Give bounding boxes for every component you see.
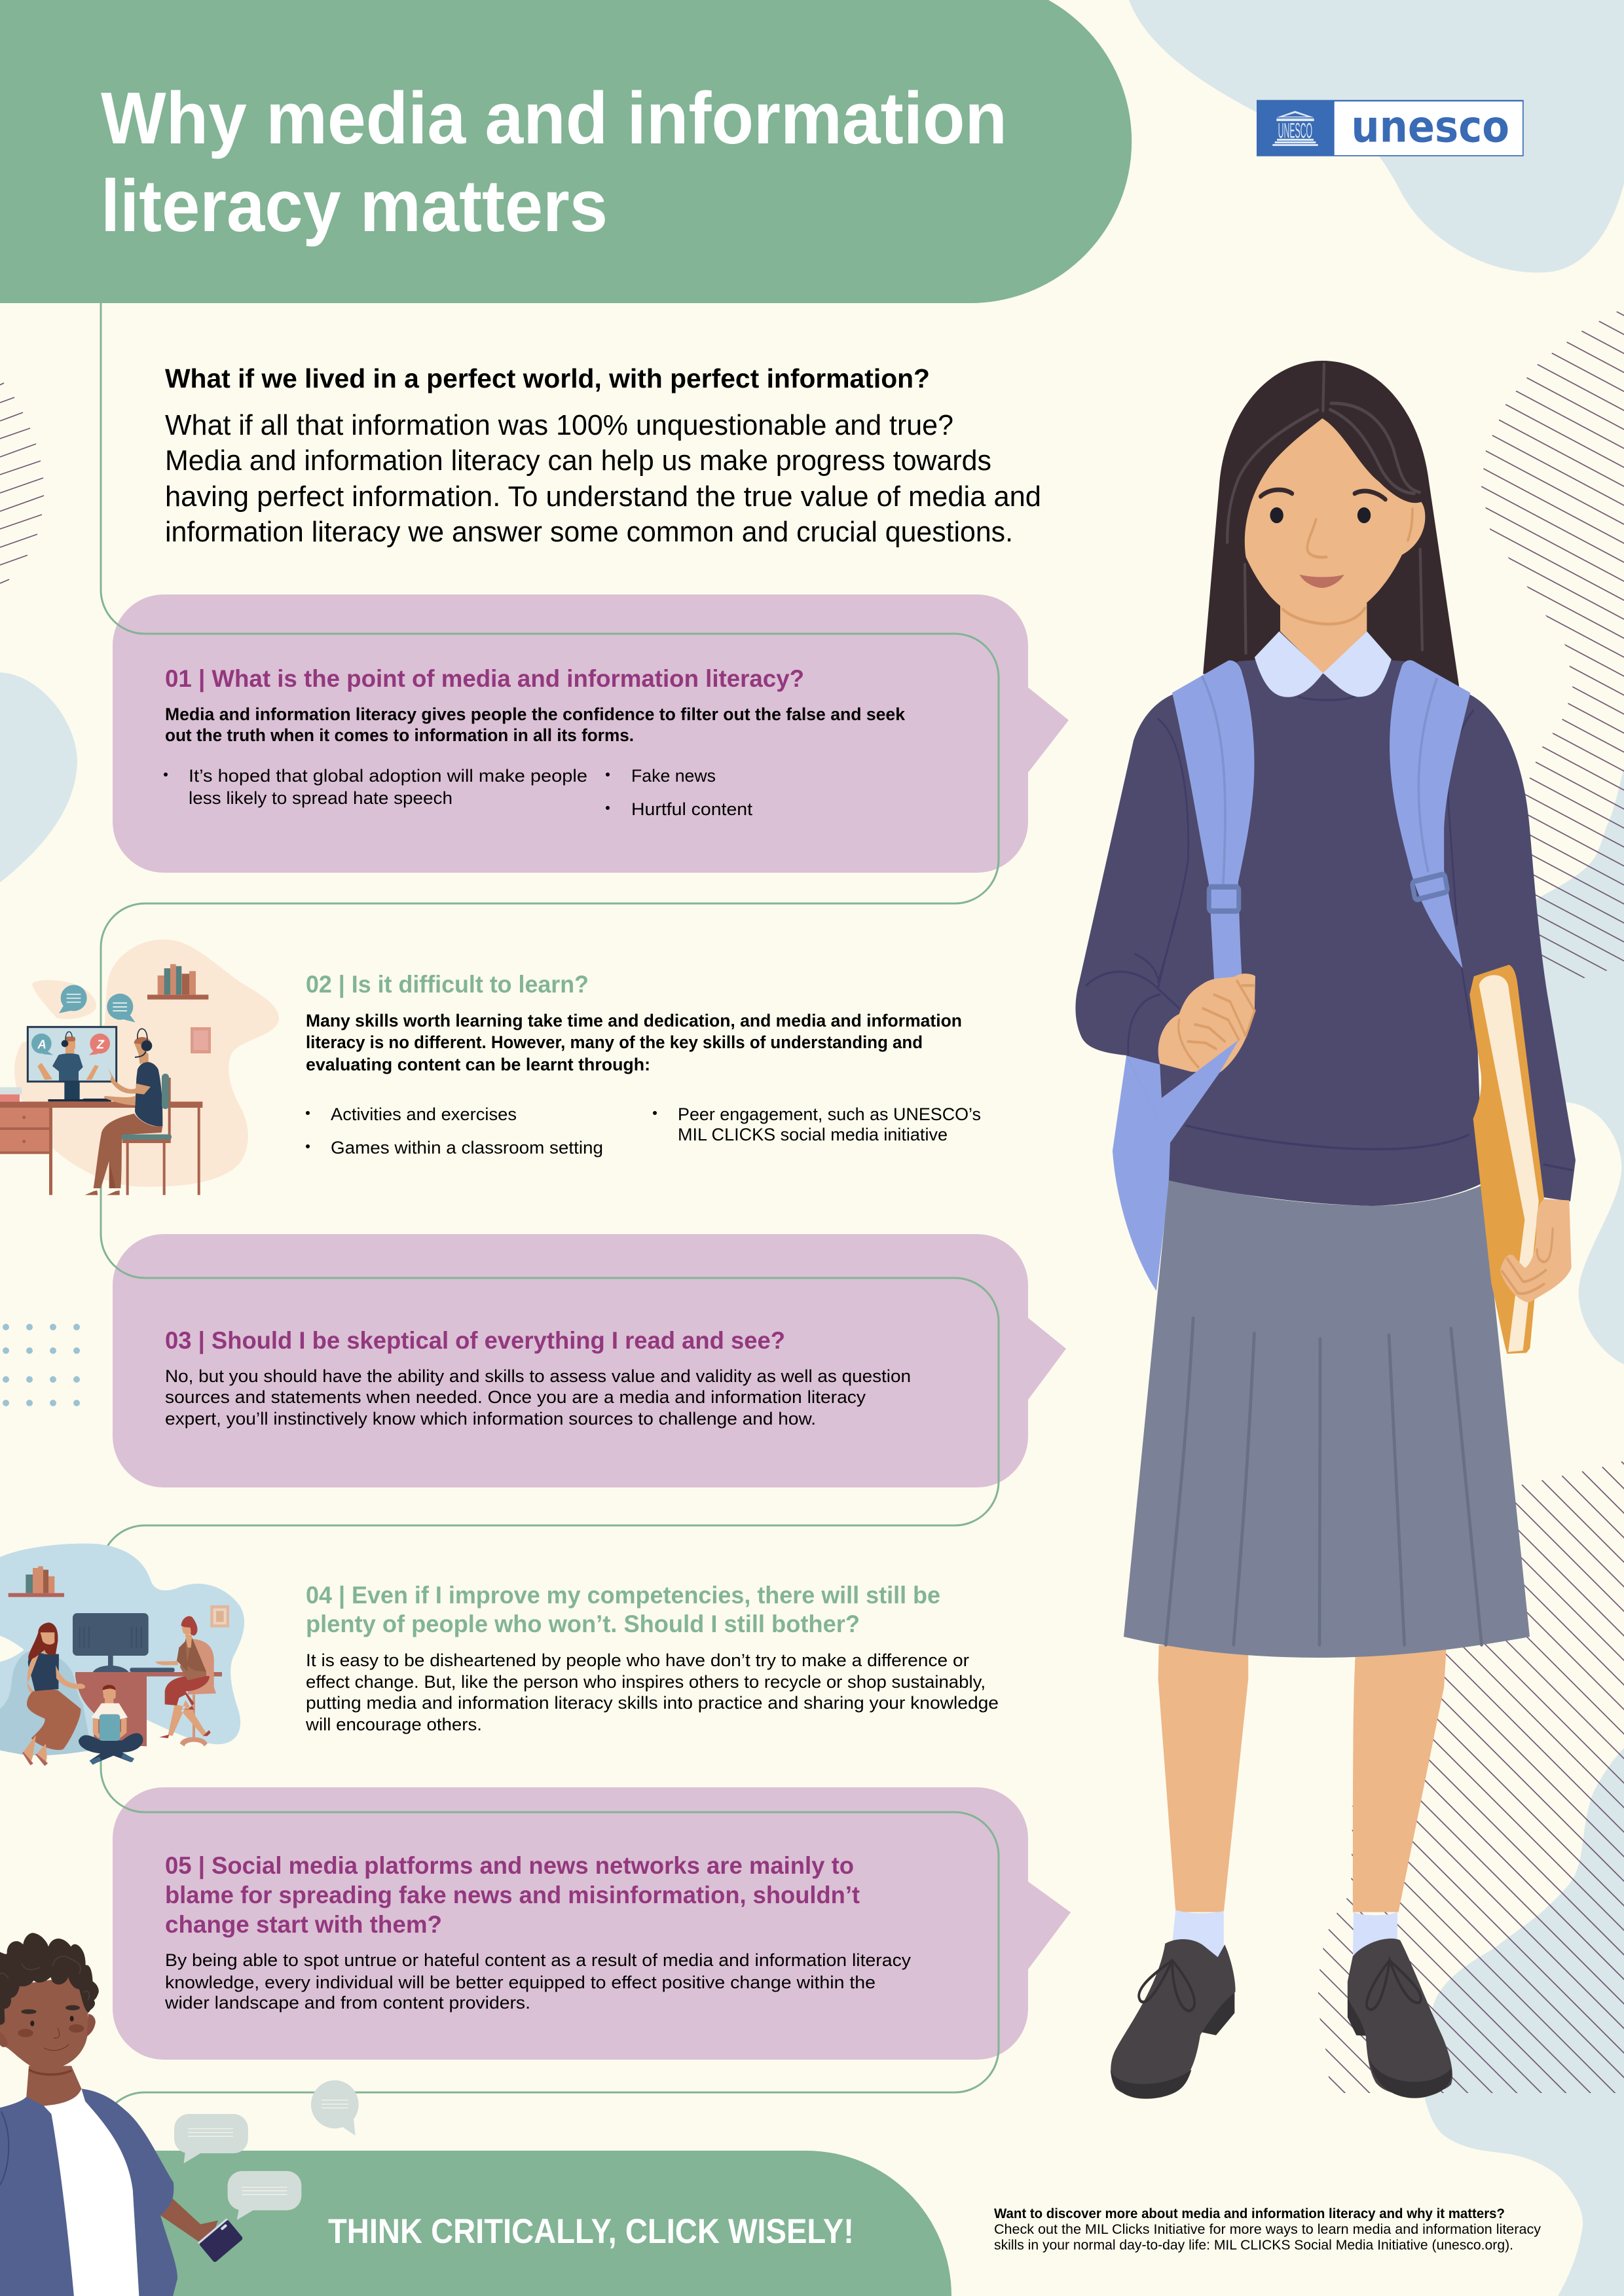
card 01 bullets: Fake news [631,766,716,786]
card 02 bullets: Activities and exercises [331,1104,517,1124]
card 03 body: sources and statements when needed. Once you are a media and information literacy [165,1387,866,1407]
card 05 body: knowledge, every individual will be better equipped to effect positive change within the [165,1973,876,1992]
footer note: Check out the MIL Clicks Initiative for more ways to learn media and information literacy [994,2222,1541,2237]
card 04 body [305,1650,999,1734]
seated boy with tablet [79,1685,143,1765]
monitor with remote person [28,1027,117,1102]
card 04 heading [306,1582,940,1637]
boy ears [0,2014,96,2047]
intro paragraph: Media and information literacy can help us make progress towards [165,445,991,477]
card 03 body: No, but you should have the ability and skills to assess value and validity as well as question [165,1366,911,1386]
card 01 lead: Media and information literacy gives people the confidence to filter out the false and seek [165,704,906,724]
card 02 bullets [306,1104,981,1157]
monitor with remote person: Z [96,1038,105,1051]
girl skirt [1124,1178,1530,1658]
card 02 heading: 02 | Is it difficult to learn? [306,971,589,998]
background blob: right middle [1493,768,1624,1364]
panel: card 05 background [113,1787,1071,2060]
card 02 bullets: Peer engagement, such as UNESCO’s [678,1104,981,1124]
card 01 text [164,665,906,819]
girl hands [1126,974,1572,1302]
title: literacy matters [101,165,608,247]
intro paragraph: What if all that information was 100% unquestionable and true? [165,409,953,441]
backpack straps [1172,660,1470,985]
illustration: family at desk [0,1544,244,1765]
footer note: Want to discover more about media and information literacy and why it matters? [994,2206,1505,2221]
card 01 bullets [164,766,753,819]
card 05 heading: change start with them? [165,1911,442,1938]
card 05 heading: 05 | Social media platforms and news networks are mainly to [165,1852,854,1880]
card 02 bullets: Games within a classroom setting [331,1138,603,1157]
title [101,77,1007,247]
shelf and books [147,964,208,1000]
card 02 lead [306,1011,962,1074]
boy face [18,2005,84,2050]
card 05 body: wider landscape and from content providers. [164,1993,530,2013]
card 02 lead: literacy is no different. However, many of the key skills of understanding and [306,1032,923,1052]
card 01 bullets: less likely to spread hate speech [189,788,452,808]
monitor with remote person: A [37,1038,46,1051]
background blob: left [0,672,77,883]
bottom call-to-action banner [98,2151,951,2296]
hatch pattern: top right [1473,301,1624,995]
card 04 body: effect change. But, like the person who inspires others to recycle or shop sustainably, [306,1672,986,1692]
woman on beanbag [23,1622,85,1765]
boy jacket [0,2088,177,2296]
boy neck [26,2066,81,2106]
call-to-action text: THINK CRITICALLY, CLICK WISELY! [328,2212,854,2251]
footer note: skills in your normal day-to-day life: MIL CLICKS Social Media Initiative (unesco.org). [994,2238,1513,2253]
card 04 text [305,1582,999,1734]
sweater folds [1086,697,1572,1170]
backpack body [1113,1054,1179,1291]
boy head details: hair, ears and face [0,1933,99,2050]
card 03 text [165,1327,911,1429]
girl sweater [1075,655,1576,1206]
card 02 lead: evaluating content can be learnt through: [306,1055,650,1074]
card 04 heading: 04 | Even if I improve my competencies, there will still be [306,1582,940,1609]
card 01 lead [165,704,906,745]
card 04 body: will encourage others. [305,1715,482,1734]
header banner [0,0,1132,303]
illustration: girl with backpack [1075,361,1576,2099]
card 05 body [164,1950,912,2013]
card 05 text [164,1852,912,2013]
girl legs, socks and shoes [1111,1645,1452,2099]
hatch pattern: bottom right [1310,1453,1624,2095]
panel: card 01 background [113,594,1069,873]
card 04 body: It is easy to be disheartened by people who have don’t try to make a difference or [306,1650,969,1670]
background blob: top right [1129,0,1624,272]
man with headset on chair [84,1029,172,1195]
intro paragraph [165,409,1041,548]
speech bubbles [59,985,136,1023]
speech bubbles [174,2081,359,2220]
logo wordmark: unesco [1351,101,1509,153]
card 05 body: By being able to spot untrue or hateful content as a result of media and information literacy [165,1950,912,1970]
hatch pattern: left [0,383,44,583]
intro paragraph: information literacy we answer some common and crucial questions. [165,516,1013,548]
intro text block [165,363,1041,548]
girl neck and face [1227,364,1425,697]
card 05 heading [165,1852,860,1938]
card 04 heading: plenty of people who won’t. Should I still bother? [306,1611,860,1637]
card 05 heading: blame for spreading fake news and misinformation, shouldn’t [165,1882,860,1908]
card 02 lead: Many skills worth learning take time and dedication, and media and information [306,1011,962,1030]
card 03 heading: 03 | Should I be skeptical of everything I read and see? [165,1327,785,1355]
illustration: boy with phone [0,1975,359,2296]
dot grid [3,1324,80,1406]
intro heading: What if we lived in a perfect world, with perfect information? [165,363,930,393]
card 01 lead: out the truth when it comes to information in all its forms. [165,725,634,745]
logo: unesco [1257,100,1524,156]
card 03 body: expert, you’ll instinctively know which information sources to challenge and how. [165,1409,816,1429]
logo temple [1272,111,1318,146]
connector line [101,303,999,2112]
card 01 bullets: Hurtful content [631,799,753,819]
card 02 bullets: MIL CLICKS social media initiative [678,1125,948,1144]
wall frame [210,1605,229,1628]
card 01 bullets: It’s hoped that global adoption will make people [189,766,587,786]
title: Why media and information [101,77,1007,159]
panel: card 03 background [113,1234,1066,1487]
intro paragraph: having perfect information. To understand the true value of media and [165,481,1041,513]
phone [198,2218,244,2263]
boy hair [0,1933,99,2025]
strap buckles [1209,874,1448,911]
card 04 body: putting media and information literacy skills into practice and sharing your knowledge [306,1693,999,1713]
girl hair [1203,361,1459,687]
wall frame [191,1027,211,1053]
desktop computer [73,1613,175,1672]
woman on office chair [155,1616,216,1747]
background blob: bottom right [1425,1748,1624,2296]
book [1469,965,1544,1354]
boy arm [160,2198,218,2244]
footer note [994,2206,1541,2253]
logo: unesco: UNESCO [1278,119,1312,143]
desk [75,1672,222,1746]
card 03 body [165,1366,911,1429]
boy head [0,1975,88,2069]
illustration: online call at desk [0,939,279,1195]
card 01 heading: 01 | What is the point of media and information literacy? [165,665,804,693]
boy shirt [44,2088,139,2296]
card 02 text [306,971,981,1157]
desk [0,1087,202,1195]
shelf and books [9,1566,64,1597]
